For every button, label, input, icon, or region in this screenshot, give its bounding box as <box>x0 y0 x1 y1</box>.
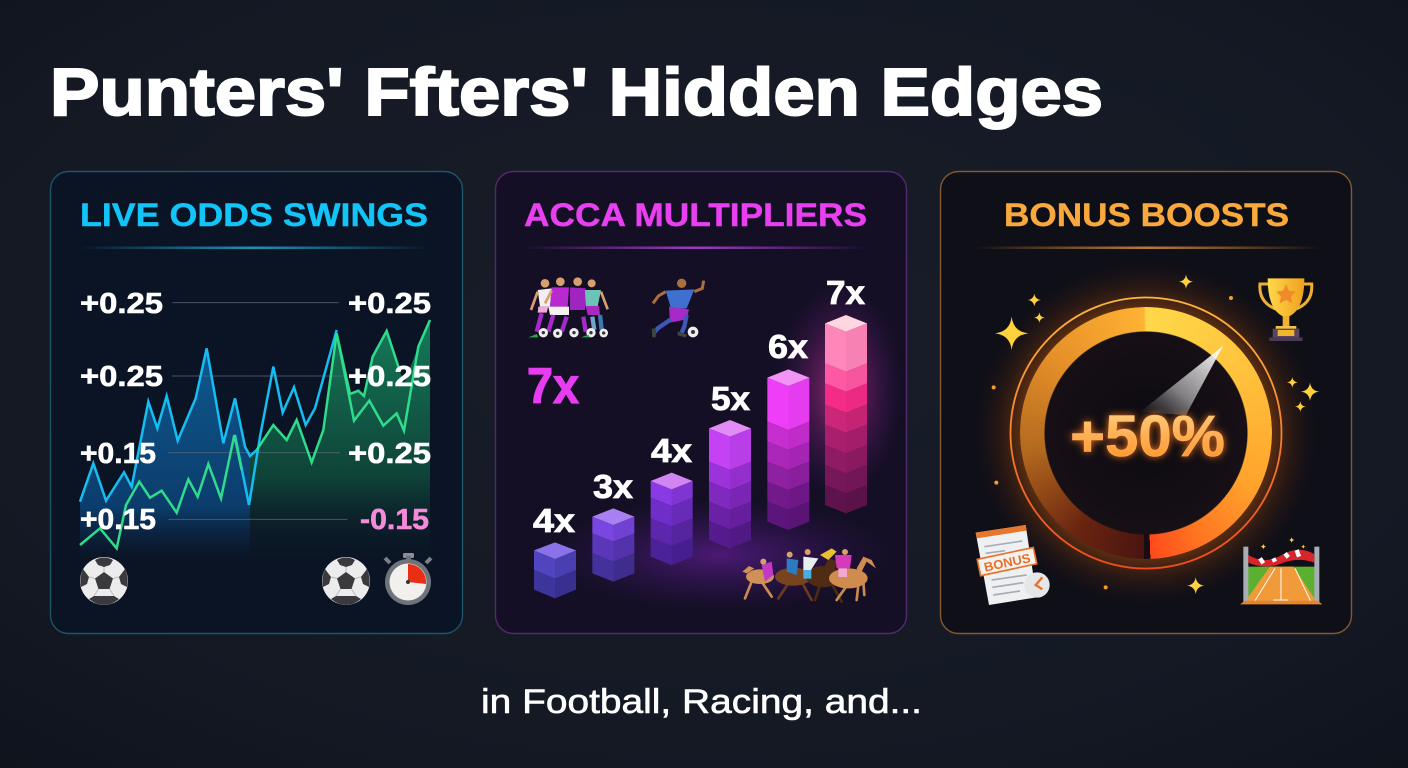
bar labels: 3x <box>593 468 634 505</box>
axis labels: +0.15 <box>80 504 156 536</box>
icon: football player <box>652 279 704 337</box>
axis labels: +0.25 <box>80 288 163 320</box>
bar 5 <box>767 369 809 530</box>
icon: football right <box>322 557 370 605</box>
bar 1 <box>534 542 576 598</box>
bar labels: 6x <box>768 328 809 365</box>
title: Punters' Ffters' Hidden Edges <box>50 55 1103 130</box>
panel: acca multipliers <box>496 172 906 634</box>
icon: football team <box>528 277 608 338</box>
bar 6 <box>825 315 867 513</box>
bar labels: 4x <box>651 432 693 469</box>
panel: bonus boosts <box>940 172 1352 634</box>
axis labels: +0.25 <box>80 361 163 393</box>
icon: trophy <box>1260 278 1312 341</box>
large 7x label: 7x <box>527 358 579 414</box>
icon: finish line <box>1240 537 1322 604</box>
axis labels: +0.25 <box>348 361 431 393</box>
line chart <box>80 303 430 563</box>
gauge outer ring <box>1010 298 1282 568</box>
bar chart <box>534 315 867 598</box>
bar labels: 4x <box>533 502 576 539</box>
heading: bonus boosts: BONUS BOOSTS <box>1004 197 1289 233</box>
bar labels: 7x <box>826 274 866 311</box>
bar 3 <box>651 473 693 565</box>
icon: racehorses <box>742 548 876 602</box>
axis labels: +0.25 <box>348 288 431 320</box>
glow behind bars <box>550 285 902 610</box>
icon: bonus slip: BONUS <box>983 551 1032 575</box>
panel: live odds swings <box>50 172 462 634</box>
axis labels <box>80 288 431 536</box>
bar 2 <box>592 508 634 582</box>
bar 4 <box>709 420 751 548</box>
icon: stopwatch <box>385 553 431 605</box>
axis labels: +0.15 <box>80 438 156 470</box>
axis labels: +0.25 <box>348 438 431 470</box>
heading: acca multipliers: ACCA MULTIPLIERS <box>524 197 867 233</box>
gauge needle <box>1140 346 1223 415</box>
icon: bonus slip <box>976 525 1050 605</box>
sparkles <box>992 274 1319 594</box>
gauge ring <box>1020 307 1272 559</box>
bar labels: 5x <box>711 380 751 417</box>
subtitle: in Football, Racing, and... <box>481 683 922 721</box>
icon: football left <box>80 557 128 605</box>
bar labels <box>533 274 866 539</box>
gauge value: +50% <box>1070 404 1225 469</box>
axis labels: -0.15 <box>360 504 429 536</box>
gauge glow <box>974 261 1318 605</box>
heading: live odds swings: LIVE ODDS SWINGS <box>80 197 428 233</box>
